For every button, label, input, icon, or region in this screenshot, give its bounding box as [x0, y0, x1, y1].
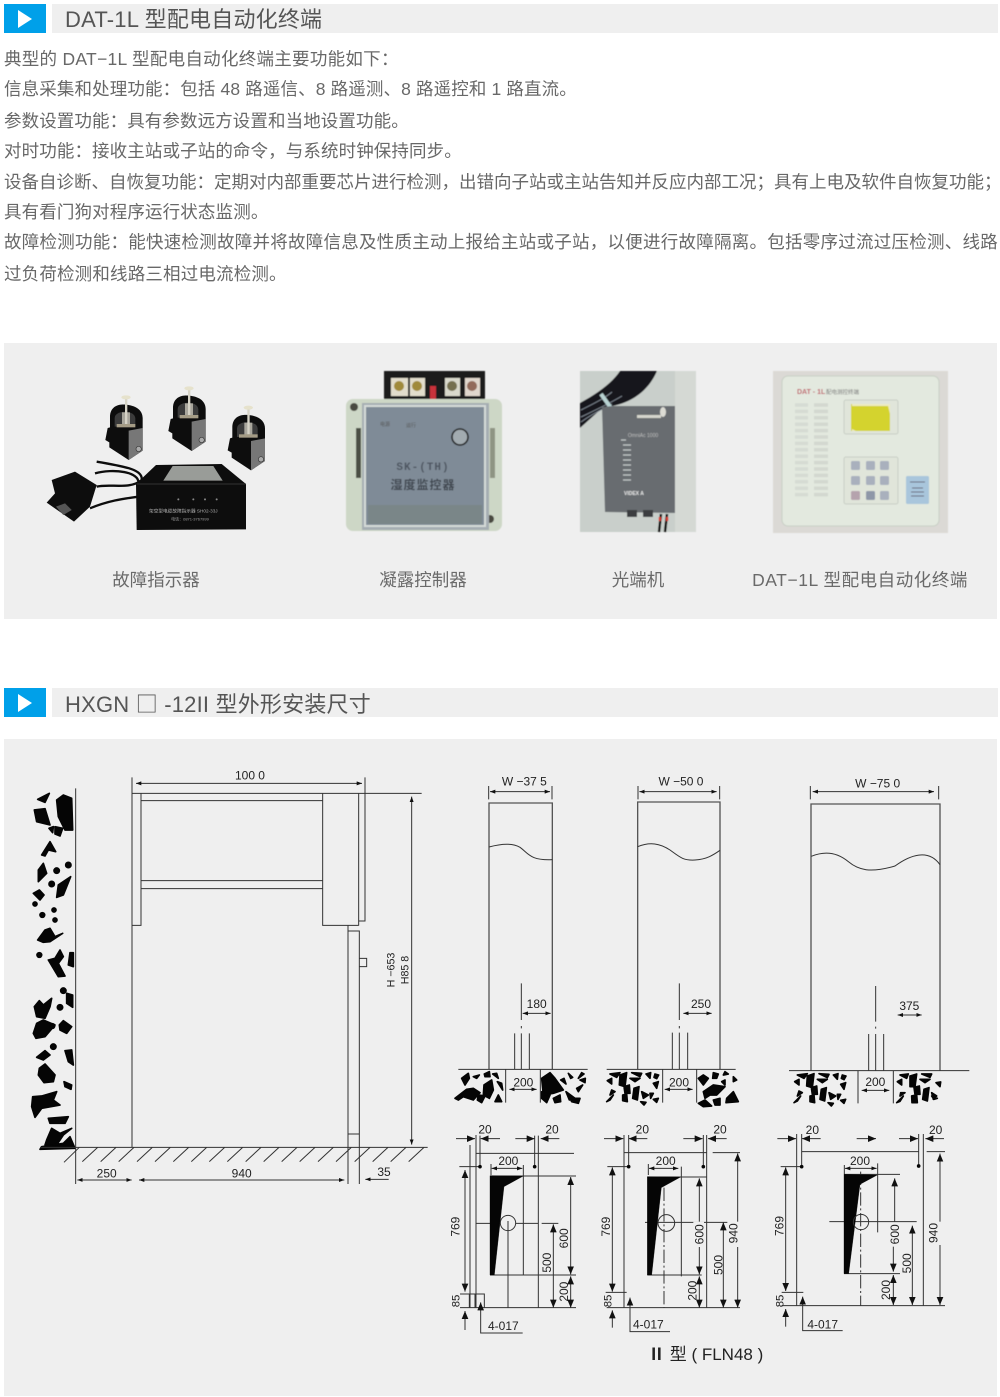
view: W-375: 200 [513, 1076, 534, 1090]
view: W-375 [455, 775, 588, 1103]
product: fault indicator: 架空型电缆故障指示器 SH02-33J [149, 508, 218, 515]
drawing: foundation plan for W-750: 200 [850, 1154, 870, 1168]
text block: function description: 过负荷检测和线路三相过电流检测。 [4, 264, 287, 284]
drawing: foundation plan for W-750: 600 [888, 1224, 902, 1244]
height dimension: H −653 [385, 953, 397, 987]
drawing: foundation plan for W-750: 500 [900, 1253, 914, 1273]
product: optical terminal [580, 371, 696, 532]
monitor box [136, 464, 246, 530]
section header: DAT-1L terminal [4, 4, 998, 33]
caption: DAT-1L terminal: DAT−1L 型配电自动化终端 [752, 570, 968, 590]
product: condensation controller [346, 371, 502, 531]
product images [46, 370, 948, 533]
product: fault indicator: 电话：0871-3767999 [171, 516, 210, 522]
plan: W-500: 20 [636, 1122, 649, 1136]
text block: function description: 信息采集和处理功能：包括 48 路遥信、8 路遥测、8 路遥控和 1 路直流。 [4, 79, 577, 99]
drawing: foundation plan for W-750: 85 [774, 1295, 786, 1307]
view: W-375: 180 [527, 997, 547, 1011]
product: fault indicator [47, 386, 265, 530]
plan: W-375: 20 [478, 1122, 492, 1136]
bundled cables [580, 371, 657, 428]
drawing: foundation plan for W-750 [772, 1123, 945, 1331]
drawing: W-750 front view [789, 776, 969, 1106]
plan: W-500: 500 [711, 1255, 725, 1275]
plan: W-500: 85 [603, 1295, 615, 1307]
view: W-500 [607, 775, 738, 1107]
text block: function description: 故障检测功能：能快速检测故障并将故障信息及性质主动上报给主站或子站，以便进行故障隔离。包括零序过流过压检测、线路 [4, 232, 998, 252]
heading: DAT-1L title [52, 4, 998, 33]
product: condensation controller: 运行 [406, 422, 416, 429]
product: DAT-1L terminal panel: DAT - 1L [797, 389, 826, 396]
product: condensation controller: 电源 [380, 421, 390, 428]
LCD [844, 400, 898, 434]
heading: installation dimensions title [52, 688, 998, 717]
heading: installation dimensions title: HXGN □ -12II 型外形安装尺寸 [65, 687, 371, 719]
sensor clip [47, 472, 97, 522]
product: optical terminal: OmniAc 1000 [628, 433, 658, 439]
indicator pills [795, 405, 828, 495]
plan: W-500: 20 [713, 1122, 727, 1136]
plan: W-375 [448, 1122, 576, 1333]
text block: function description: 设备自诊断、自恢复功能：定期对内部重要芯片进行检测，出错向子站或主站告知并反应内部工况；具有上电及软件自恢复功能； [4, 172, 1000, 192]
clamp sensors [105, 386, 265, 470]
floor hatching [64, 1147, 424, 1162]
plan: W-500: 940 [727, 1223, 741, 1243]
bottom dimensions: 35 [377, 1165, 391, 1179]
plan: W-375: 85 [450, 1295, 462, 1307]
icon: blue play arrow [4, 688, 46, 717]
text block: function description: 对时功能：接收主站或子站的命令，与系统时钟保持同步。 [4, 141, 462, 161]
wall and floor [40, 788, 428, 1184]
green housing [346, 399, 502, 531]
bottom dimensions: 250 [97, 1166, 117, 1180]
cabinet outline [132, 777, 422, 1184]
product: condensation controller: SK-(TH) [396, 462, 450, 474]
drawing: W-750 front view: 375 [899, 999, 920, 1013]
width dimension 1000: 100 0 [235, 768, 265, 782]
wall rocks [32, 793, 75, 1149]
plan: W-375: 500 [540, 1252, 554, 1273]
height dimension [385, 797, 412, 1145]
view: W-500: 200 [669, 1076, 689, 1090]
drawing: W-750 front view: W −75 0 [855, 776, 900, 790]
drawing: W-750 front view: 200 [865, 1075, 886, 1089]
plan: W-375: 769 [448, 1216, 462, 1237]
bottom dimensions: 940 [232, 1166, 252, 1180]
text block: function description: 具有看门狗对程序运行状态监测。 [4, 202, 268, 222]
drawing: W-375 and W-500 front views [455, 775, 738, 1107]
product: optical terminal: VIDEX A [624, 491, 644, 497]
installation dimension drawings [30, 768, 970, 1334]
plan: W-375: 200 [557, 1281, 571, 1302]
heading: DAT-1L title: DAT-1L 型配电自动化终端 [65, 7, 322, 32]
product: condensation controller: 湿度监控器 [390, 477, 456, 492]
section header: HXGN dimensions [4, 687, 998, 719]
caption: fault indicator: 故障指示器 [112, 570, 200, 590]
view: W-500: W −50 0 [659, 775, 704, 789]
cables [90, 462, 142, 508]
bottom dimensions [77, 1165, 391, 1180]
plan: W-500: 600 [693, 1224, 707, 1244]
drawing: foundation plan for W-750: 20 [929, 1123, 943, 1137]
view: W-375: W −37 5 [502, 775, 547, 789]
view: W-500: 250 [691, 997, 711, 1011]
plan: W-500: 769 [599, 1216, 613, 1237]
panel: installation drawings background [4, 739, 997, 1396]
caption: type II FLN48: Ⅱ 型 ( FLN48 ) [648, 1345, 763, 1364]
plan: W-500 [599, 1122, 743, 1332]
drawing: foundation plan for W-750: 20 [806, 1123, 819, 1137]
text block: function description [4, 49, 1000, 284]
drawing: foundation plan for W-750: 940 [927, 1223, 941, 1243]
blue label [906, 476, 929, 504]
plan: W-500: 200 [685, 1280, 699, 1301]
caption: optical terminal: 光端机 [612, 570, 664, 590]
drawing: foundation plans for W-375 and W-500 [448, 1122, 743, 1333]
product: DAT-1L terminal panel: 配电测控终端 [826, 388, 860, 396]
plan: W-375: 4-017 [488, 1319, 519, 1333]
terminal strip [384, 371, 485, 403]
plan: W-375: 20 [545, 1122, 559, 1136]
keypad [844, 457, 898, 504]
drawing: foundation plan for W-750: 200 [879, 1280, 893, 1300]
caption: condensation controller: 凝露控制器 [379, 570, 467, 590]
panel: product photos [4, 343, 997, 619]
text block: function description: 典型的 DAT−1L 型配电自动化终端主要功能如下： [4, 49, 399, 69]
product: DAT-1L terminal panel [773, 371, 948, 533]
drawing: foundation plan for W-750: 4-017 [807, 1317, 838, 1331]
text block: function description: 参数设置功能：具有参数远方设置和当地设置功能。 [4, 111, 409, 131]
height dimension: H85 8 [399, 956, 411, 984]
icon: blue play arrow [4, 4, 46, 33]
plan: W-375: 200 [498, 1154, 519, 1168]
unit face [602, 406, 675, 513]
drawing: side elevation [32, 768, 428, 1184]
plan: W-375: 600 [557, 1228, 571, 1248]
drawing: foundation plan for W-750: 769 [772, 1216, 786, 1236]
plan: W-500: 200 [656, 1154, 676, 1168]
plan: W-500: 4-017 [633, 1318, 664, 1332]
